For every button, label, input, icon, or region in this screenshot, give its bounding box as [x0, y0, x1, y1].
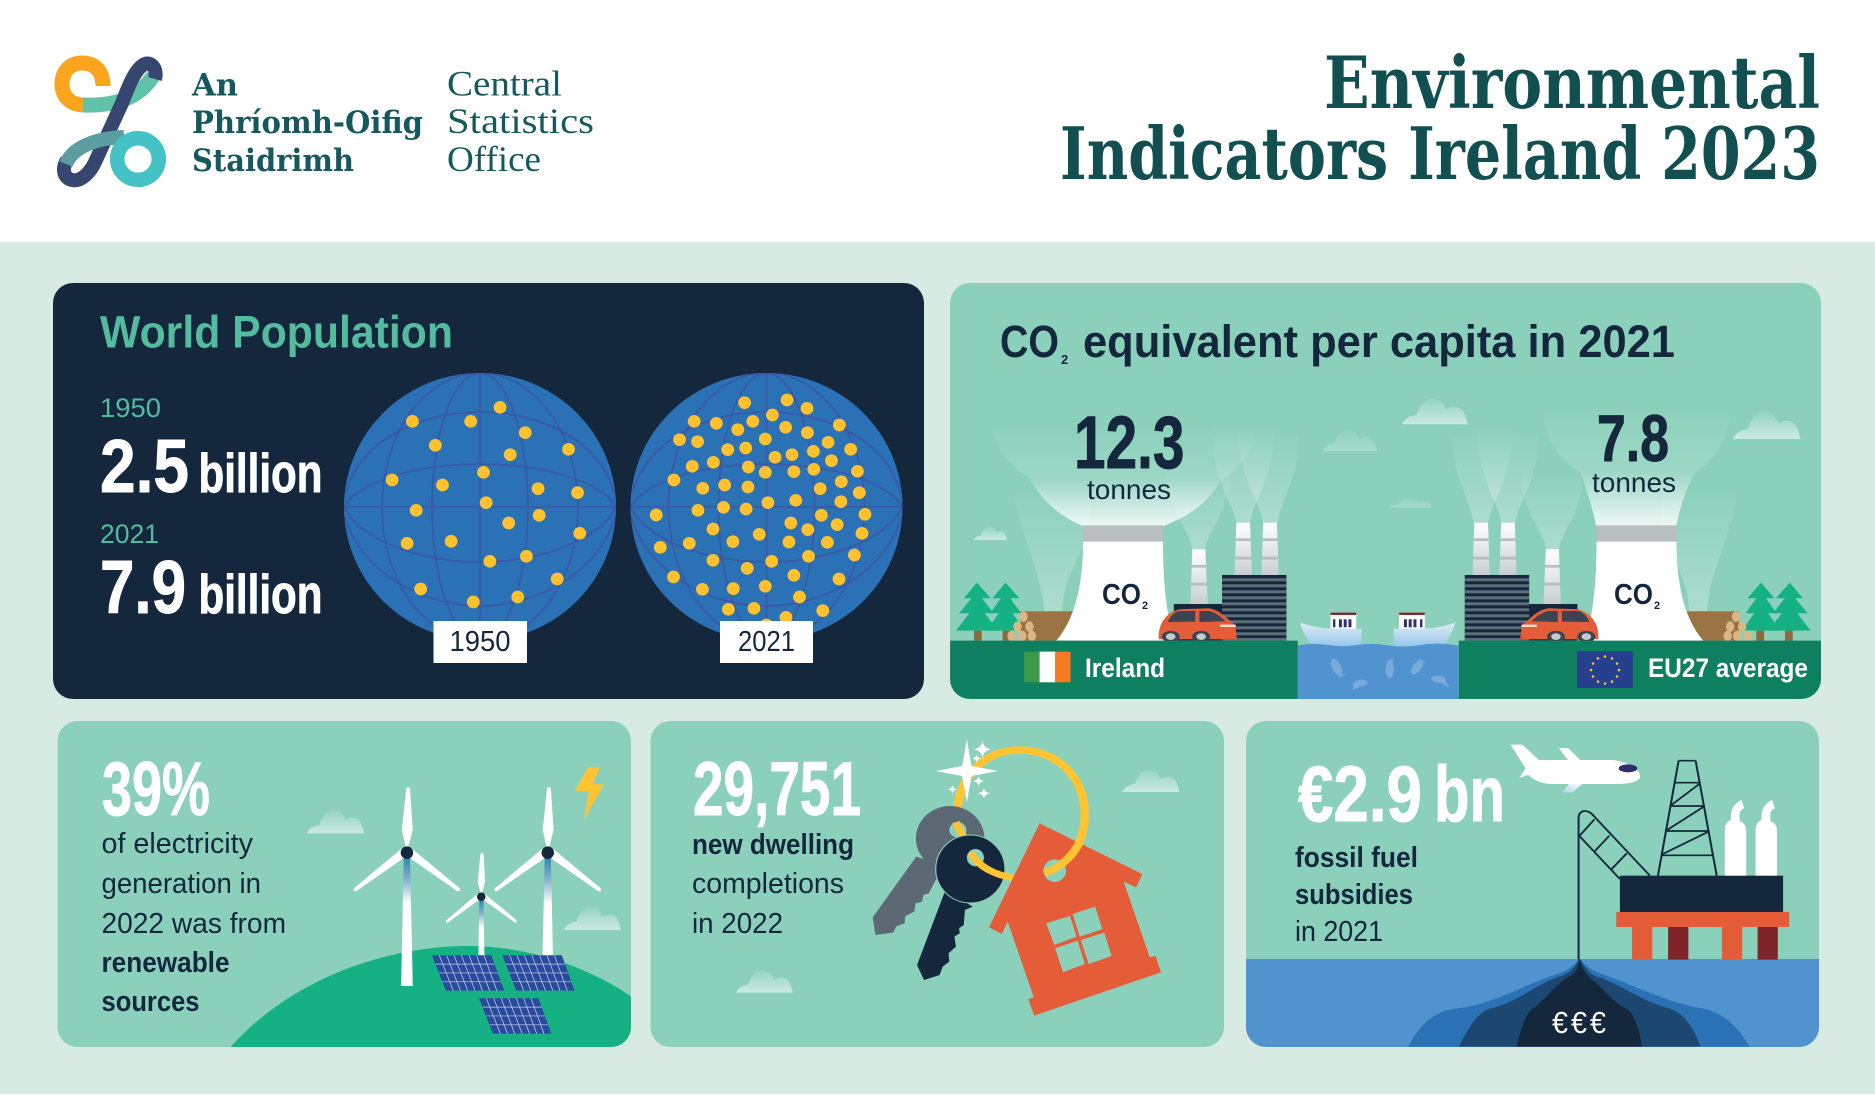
title — [1060, 40, 1820, 196]
smoke plumes: Ireland side — [1013, 427, 1300, 611]
turbine: small — [446, 853, 517, 977]
stat: 1950 population: 1950 — [100, 393, 161, 423]
CO2 illustration scene — [950, 398, 1821, 699]
stat: 2021 population — [100, 519, 322, 629]
population dots 2021 — [650, 394, 871, 631]
navy key — [917, 835, 1015, 980]
label: Ireland: Ireland — [1085, 653, 1165, 683]
rig legs and deck — [1616, 876, 1789, 960]
oil rig illustration — [1408, 745, 1789, 1047]
logo text: English name — [447, 64, 594, 179]
heading: world population: World Population — [100, 306, 453, 358]
logo text: Irish name — [191, 68, 423, 179]
turbine: large left — [354, 787, 460, 986]
house keyring — [989, 823, 1161, 1016]
car: Ireland — [1159, 608, 1237, 642]
euro symbols — [1552, 1005, 1606, 1040]
globe 2021 — [630, 373, 902, 663]
year label 1950: 1950 — [450, 626, 510, 658]
panel: renewable electricity — [58, 721, 632, 1047]
tower label: CO2 Ireland: 2 — [1142, 600, 1148, 612]
trees: EU — [1742, 583, 1811, 641]
stat: 2021 population: 7.9 — [100, 545, 186, 629]
stat: €2.9 bn: €2.9 — [1298, 749, 1422, 838]
stat: Ireland 12.3 tonnes: tonnes — [1087, 474, 1171, 505]
panel: CO2 equivalent per capita — [950, 283, 1821, 699]
text: renewable description: generation in — [102, 868, 261, 900]
smoke plumes: EU side — [1452, 427, 1738, 611]
stat: EU 7.8 tonnes: 7.8 — [1597, 401, 1669, 475]
stat: 39%: 39% — [102, 747, 210, 832]
clouds — [736, 769, 1179, 993]
globe 1950 — [344, 373, 616, 663]
euro symbols: € — [1571, 1005, 1587, 1040]
panel: fossil fuel subsidies — [1246, 721, 1819, 1049]
logo text: English name: Statistics — [447, 101, 594, 141]
page background — [0, 242, 1875, 1094]
ship: Ireland side — [1300, 613, 1362, 646]
derrick and crane — [1579, 761, 1717, 959]
oil reservoir — [1408, 958, 1749, 1047]
stat: 29,751: 29,751 — [693, 747, 861, 832]
stat: 1950 population: billion — [198, 442, 322, 504]
year label 2021 — [720, 621, 813, 663]
logo text: English name: Central — [447, 64, 562, 104]
clouds — [307, 810, 621, 930]
logs and cooling tower: Ireland — [1007, 525, 1174, 641]
euro symbols: € — [1590, 1005, 1606, 1040]
hill — [230, 946, 632, 1047]
year label 2021: 2021 — [738, 626, 795, 658]
Irish flag — [1024, 652, 1071, 682]
text: subsidies description: fossil fuel — [1295, 842, 1418, 874]
wind and solar illustration — [307, 767, 621, 1034]
grey key — [873, 806, 984, 935]
solar panel 1 — [432, 955, 504, 991]
text: subsidies description: subsidies — [1295, 879, 1413, 911]
heading: CO2 equivalent: 2 — [1061, 352, 1068, 367]
plane — [1511, 745, 1640, 793]
ground: Ireland — [950, 641, 1298, 699]
euro symbols: € — [1552, 1005, 1568, 1040]
keys illustration — [736, 739, 1179, 1016]
logo text: Irish name: Phríomh-Oifig — [192, 105, 423, 141]
ground: EU — [1459, 641, 1821, 699]
sea — [1246, 959, 1819, 1049]
tower label: CO2 Ireland: CO — [1102, 579, 1141, 611]
heading: CO2 equivalent: CO — [1000, 316, 1059, 367]
text: renewable description: renewable — [102, 947, 230, 979]
panel: world population — [53, 283, 924, 699]
stat: 1950 population — [100, 393, 322, 508]
text: renewable description: of electricity — [102, 828, 253, 860]
stat: €2.9 bn: bn — [1434, 749, 1505, 838]
factory: Ireland — [1174, 523, 1286, 641]
solar panel 2 — [502, 955, 575, 991]
stat: Ireland 12.3 tonnes — [1074, 401, 1184, 505]
label: EU27 average: EU27 average — [1648, 653, 1808, 683]
tower label: CO2 EU: 2 — [1654, 600, 1660, 612]
car: EU — [1520, 608, 1598, 642]
text: renewable description: 2022 was from — [102, 908, 286, 940]
text: renewable description — [102, 828, 286, 1018]
sparkles — [936, 739, 998, 802]
gas tanks — [1725, 800, 1777, 876]
panel: new dwellings — [650, 721, 1224, 1047]
EU flag — [1577, 651, 1633, 688]
solar panel 3 — [479, 998, 551, 1034]
text: subsidies description — [1295, 842, 1418, 948]
clouds — [974, 398, 1800, 540]
text: subsidies description: in 2021 — [1295, 916, 1383, 948]
text: dwellings description: in 2022 — [692, 908, 783, 940]
text: renewable description: sources — [102, 986, 200, 1018]
stat: 2021 population: billion — [198, 563, 322, 625]
logs and cooling tower: EU — [1586, 525, 1752, 641]
population dots 1950 — [386, 401, 586, 608]
logo text: Irish name: Staidrimh — [192, 143, 354, 179]
ship: EU side — [1394, 613, 1455, 646]
stat: 1950 population: 2.5 — [100, 424, 189, 508]
logo: CSO knot mark — [62, 63, 159, 180]
stat: 2021 population: 2021 — [100, 519, 159, 549]
tower label: CO2 EU: CO — [1614, 579, 1653, 611]
factory: EU — [1465, 523, 1577, 641]
stat: Ireland 12.3 tonnes: 12.3 — [1074, 401, 1184, 484]
stat: EU 7.8 tonnes — [1592, 401, 1676, 498]
key ring — [957, 750, 1085, 873]
turbine: large right — [494, 787, 601, 986]
text: dwellings description: completions — [692, 868, 844, 900]
text: dwellings description: new dwelling — [692, 829, 854, 861]
trees: Ireland — [956, 583, 1025, 641]
text: dwellings description — [692, 829, 854, 940]
year label 1950 — [434, 621, 527, 663]
logo text: Irish name: An — [191, 68, 238, 104]
smoke plume: Ireland cooling tower — [1000, 449, 1248, 526]
heading: CO2 equivalent: equivalent per capita in 2021 — [1083, 316, 1675, 367]
stat: EU 7.8 tonnes: tonnes — [1592, 467, 1676, 498]
smoke plume: EU cooling tower — [1549, 436, 1724, 526]
icon: lightning bolt — [575, 767, 604, 819]
logo text: English name: Office — [447, 139, 541, 179]
water with fish — [1298, 644, 1459, 699]
